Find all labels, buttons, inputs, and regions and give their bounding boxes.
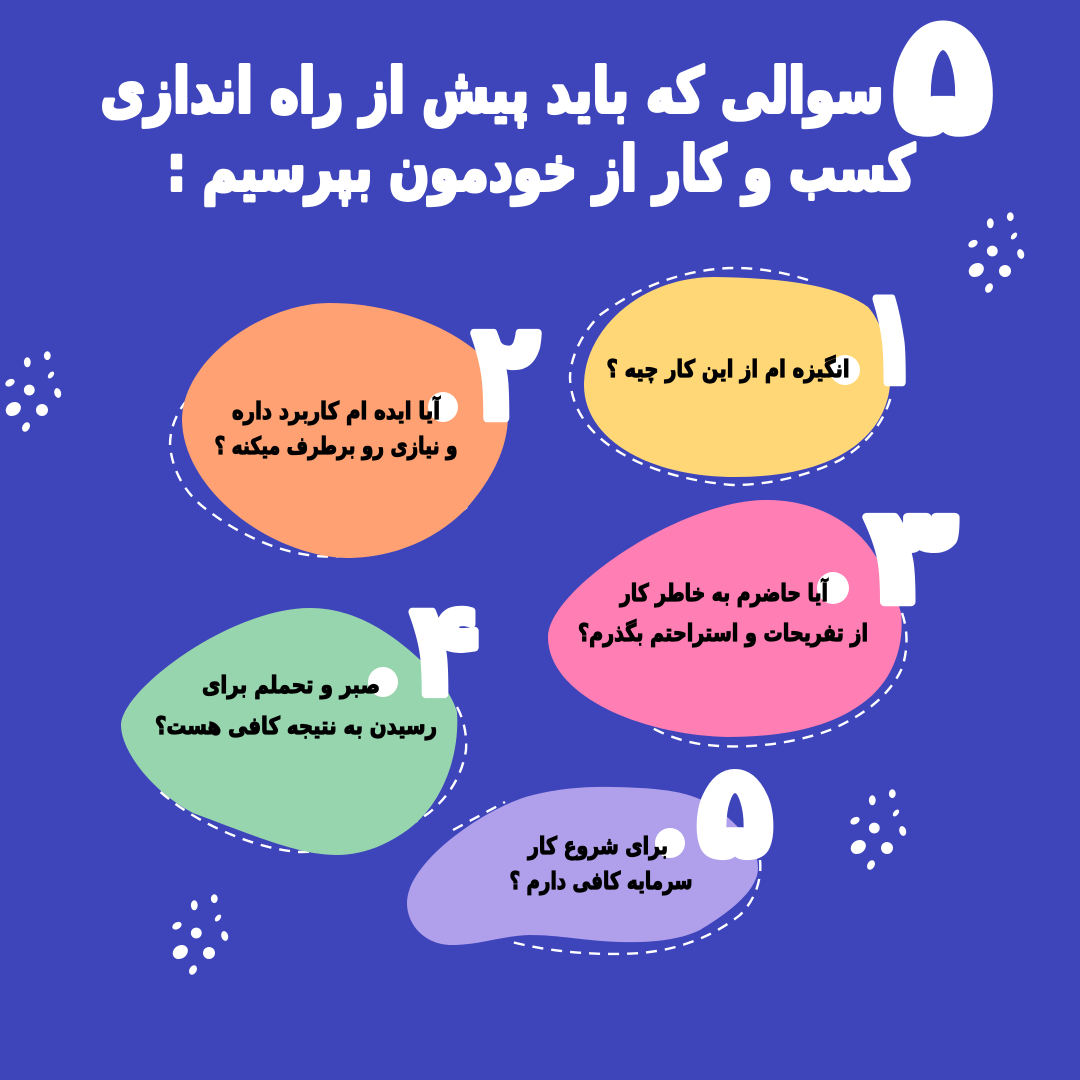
panel: question 4: رسیدن به نتیجه کافی هست؟ (155, 712, 437, 740)
title: سوالی که باید پیش از راه اندازی (100, 54, 884, 127)
panel: question 3: آیا حاضرم به خاطر کار (619, 578, 829, 607)
panel: question 3 (548, 478, 957, 746)
panel: question 1 (570, 260, 920, 485)
panel: question 5 (407, 737, 773, 954)
panel: question 2: و نیازی رو برطرف میکنه ؟ (214, 432, 458, 460)
decoration: dots top right (966, 212, 1025, 294)
panel: question 5: برای شروع کار (527, 832, 668, 860)
panel: question 2: آیا ایده ام کاربرد داره (232, 396, 441, 425)
title (100, 54, 916, 205)
panel: question 4: صبر و تحملم برای (202, 671, 380, 699)
panel: question 3: ۳ (865, 478, 957, 634)
panel: question 5: ۵ (697, 737, 773, 885)
panel: question 1: ۱ (862, 260, 920, 413)
panel: question 2: ۲ (472, 293, 540, 450)
decoration: dots lower left (170, 894, 229, 976)
panel: question 5: سرمایه کافی دارم ؟ (510, 867, 692, 895)
panel: question 4: ۴ (411, 573, 479, 725)
panel: question 3: از تفریحات و استراحتم بگذرم؟ (578, 619, 868, 647)
decoration: dots left (3, 351, 62, 433)
panel: question 1: انگیزه ام از این کار چیه ؟ (606, 355, 850, 383)
decoration: dots lower right (848, 789, 907, 871)
panel: question 4 (121, 573, 479, 855)
panel: question 2 (170, 293, 540, 558)
